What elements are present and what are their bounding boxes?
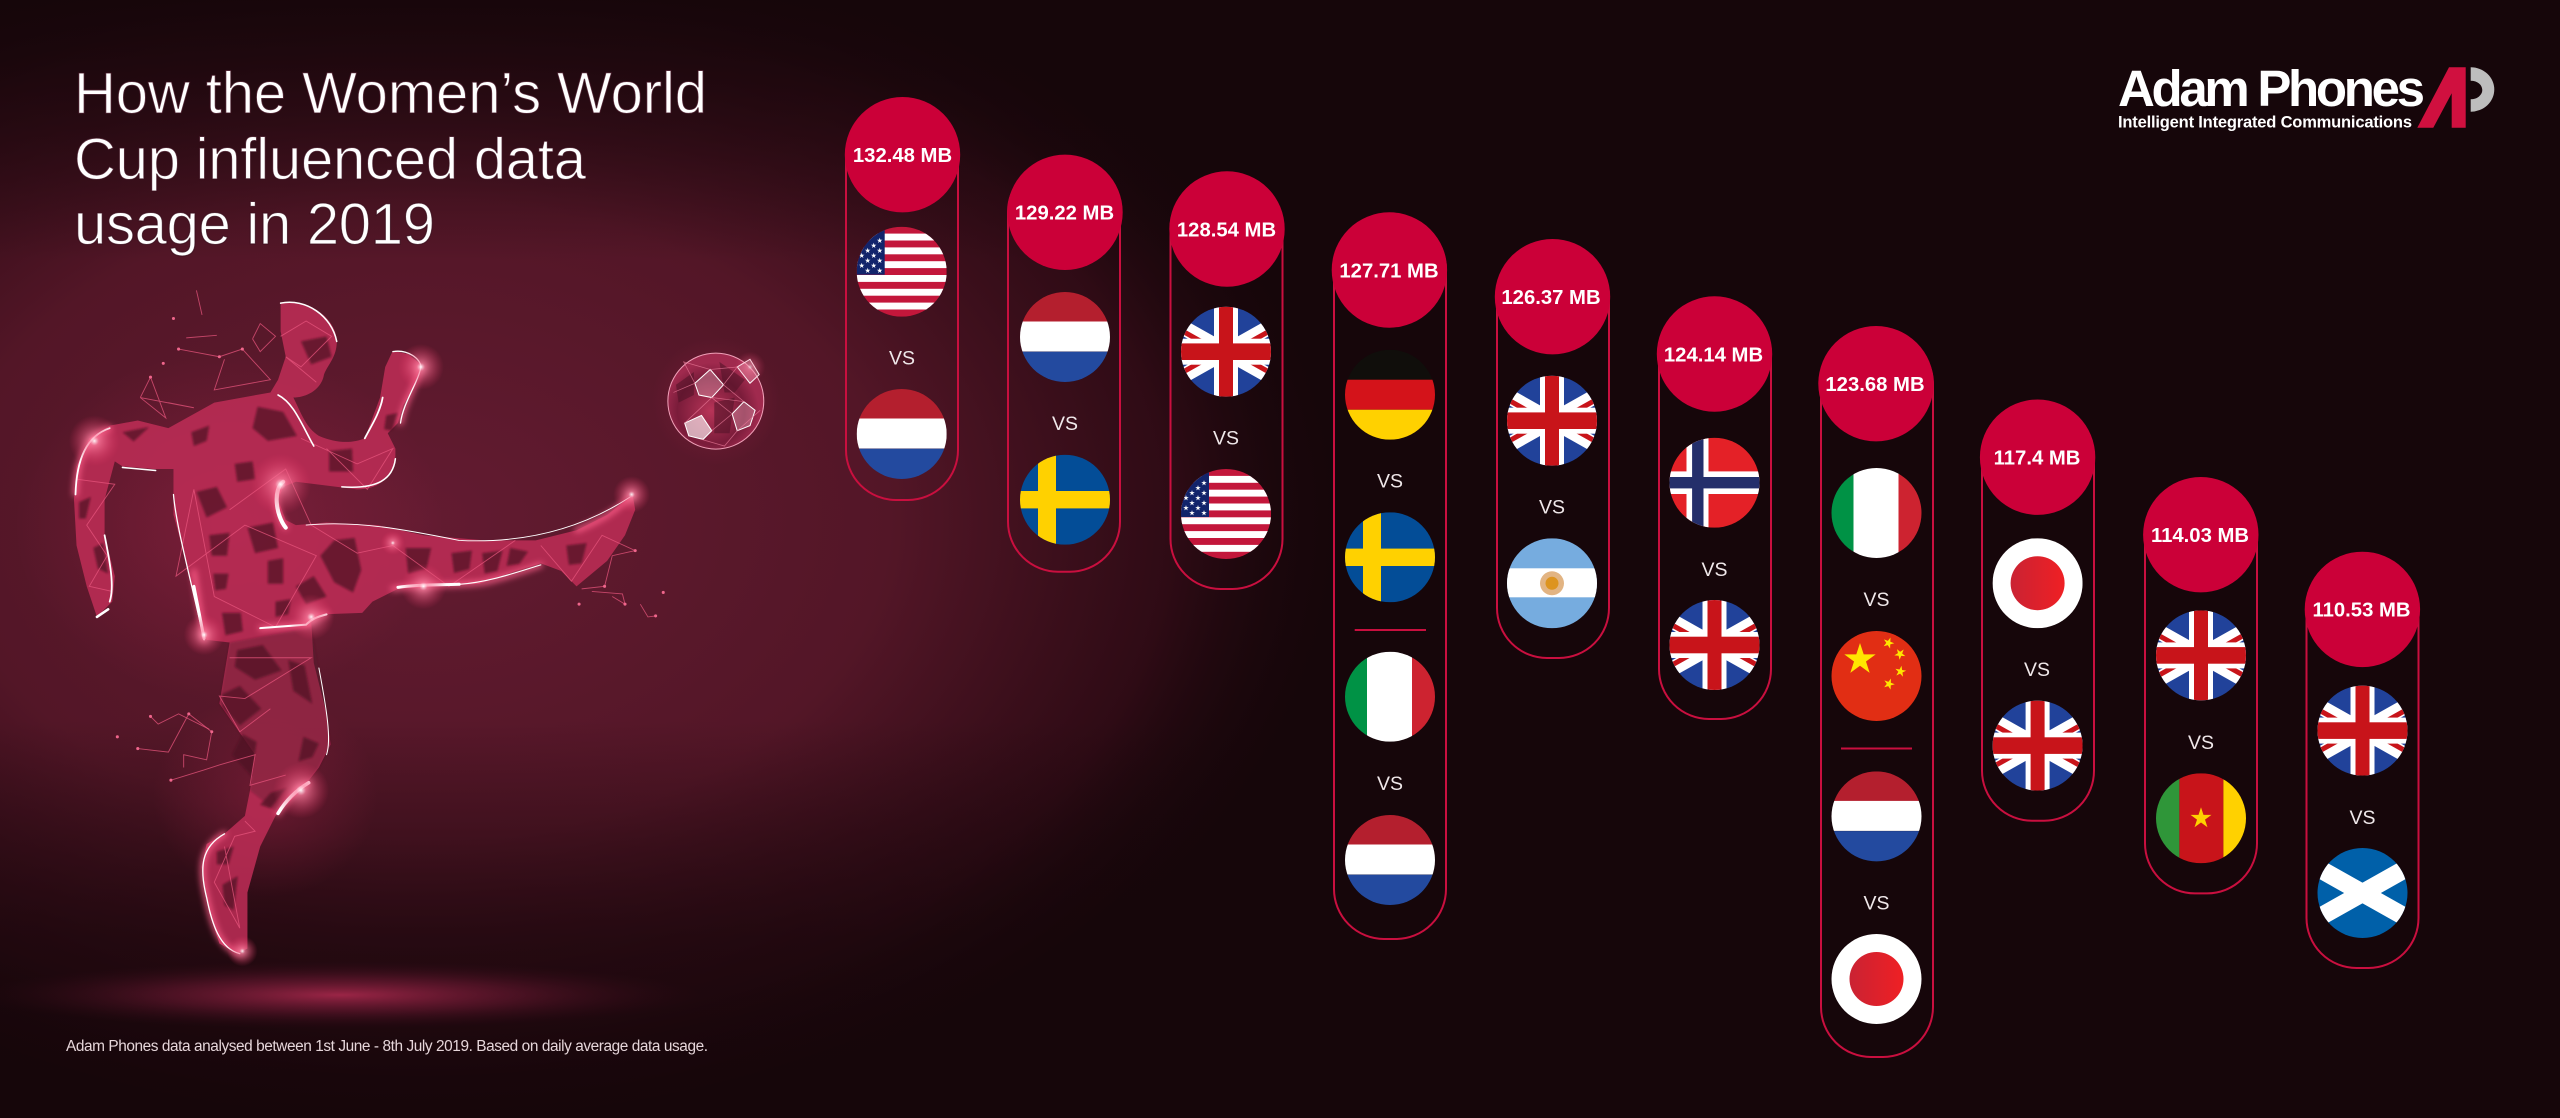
flag: China xyxy=(1832,631,1922,721)
flag: Italy xyxy=(1345,652,1435,742)
value badge: 110.53 MB xyxy=(2312,600,2411,622)
card: 114.03 MB England v Cameroon xyxy=(2121,477,2281,893)
mesh network lines xyxy=(77,290,656,928)
value badge xyxy=(1332,212,1447,328)
flag: UK xyxy=(1146,307,1306,397)
VS label: VS xyxy=(2349,807,2376,829)
card: 110.53 MB England v Scotland xyxy=(2282,552,2442,968)
value badge xyxy=(1495,239,1610,354)
flag: Italy xyxy=(1832,468,1922,558)
flag: Netherlands xyxy=(1832,771,1922,862)
flag: Japan xyxy=(1993,538,2083,628)
ball xyxy=(652,337,780,465)
flag: Sweden xyxy=(1020,455,1110,545)
VS label: VS xyxy=(2024,659,2050,681)
VS label: VS xyxy=(1052,413,1078,435)
rim glow xyxy=(76,367,632,954)
value badge xyxy=(2143,477,2258,592)
VS label: VS xyxy=(1377,470,1403,492)
title: How the Women’s World xyxy=(74,61,707,126)
flag: Netherlands xyxy=(857,389,947,480)
flag: Japan xyxy=(1832,934,1922,1024)
mesh holes xyxy=(79,336,587,910)
flag: UK xyxy=(1634,600,1794,690)
VS label: VS xyxy=(1539,496,1565,518)
white rim highlights xyxy=(76,302,630,954)
logo mark P xyxy=(2471,67,2494,112)
value badge: 128.54 MB xyxy=(1177,220,1276,242)
value badge xyxy=(2305,552,2420,667)
standing leg shading xyxy=(219,627,331,811)
logo mark A xyxy=(2417,67,2466,128)
value badge: 129.22 MB xyxy=(1015,202,1114,224)
flag: USA xyxy=(1181,469,1271,559)
value badge xyxy=(1818,326,1934,441)
flag: Argentina xyxy=(1507,538,1597,628)
card: 132.48 MB USA v Netherlands xyxy=(845,97,960,500)
card: 128.54 MB England v USA xyxy=(1146,171,1306,589)
flag: UK xyxy=(2282,686,2442,776)
value badge xyxy=(1007,155,1123,270)
VS label: VS xyxy=(1701,559,1728,581)
flag: USA xyxy=(857,227,947,317)
flag: Scotland xyxy=(2282,848,2442,938)
flag: Netherlands xyxy=(1345,815,1435,906)
value badge xyxy=(1169,171,1285,287)
value badge: 126.37 MB xyxy=(1501,287,1601,309)
flag: Germany xyxy=(1345,350,1435,440)
value badge: 117.4 MB xyxy=(1994,448,2080,470)
flag: Norway xyxy=(1670,438,1760,528)
logo tagline: Intelligent Integrated Communications xyxy=(2118,114,2412,132)
card: 123.68 MB two matches xyxy=(1818,326,1934,1057)
title xyxy=(74,61,707,257)
logo: Adam Phones xyxy=(2118,60,2494,132)
value badge: 124.14 MB xyxy=(1664,344,1763,366)
card: 124.14 MB Norway v England xyxy=(1634,296,1794,719)
floor glow xyxy=(0,961,700,1029)
illustration: polygon-mesh footballer xyxy=(15,290,780,966)
player halo xyxy=(15,352,444,898)
flag: UK xyxy=(1472,376,1632,466)
card: 117.4 MB Japan v England xyxy=(1958,400,2118,821)
footnote: Adam Phones data analysed between 1st June - 8th July 2019. Based on daily average data usage. xyxy=(66,1038,708,1055)
card: 127.71 MB two matches xyxy=(1332,212,1447,939)
value badge: 114.03 MB xyxy=(2151,525,2249,547)
value badge xyxy=(1657,296,1772,412)
value badge: 127.71 MB xyxy=(1339,260,1439,282)
flag: Sweden xyxy=(1345,512,1435,602)
title: Cup influenced data xyxy=(74,127,587,192)
mesh nodes xyxy=(116,317,665,782)
card: 126.37 MB England v Argentina xyxy=(1472,239,1632,658)
flag: Cameroon xyxy=(2156,773,2246,863)
VS label: VS xyxy=(1863,589,1890,611)
flag: UK xyxy=(2121,610,2281,700)
value badge: 123.68 MB xyxy=(1825,374,1925,396)
value badge: 132.48 MB xyxy=(853,145,952,167)
flag: Netherlands xyxy=(1020,292,1110,383)
value badge xyxy=(1980,400,2095,515)
flag: UK xyxy=(1958,701,2118,791)
player silhouette xyxy=(74,302,635,954)
glow spots xyxy=(69,344,650,966)
VS label: VS xyxy=(1863,892,1890,914)
title: usage in 2019 xyxy=(74,192,435,257)
VS label: VS xyxy=(889,348,915,370)
card: 129.22 MB Netherlands v Sweden xyxy=(1007,155,1123,572)
VS label: VS xyxy=(2188,732,2214,754)
VS label: VS xyxy=(1377,773,1403,795)
logo wordmark: Adam Phones xyxy=(2118,60,2425,117)
VS label: VS xyxy=(1213,428,1239,450)
value badge xyxy=(845,97,960,212)
